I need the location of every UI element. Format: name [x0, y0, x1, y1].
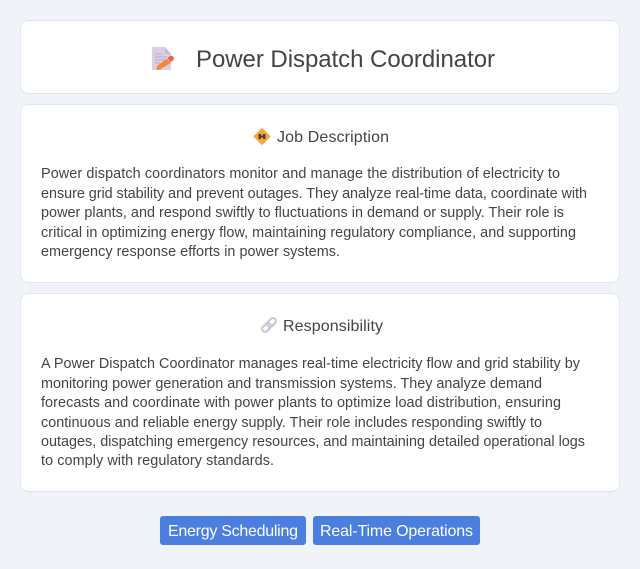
text block: responsibility: to comply with regulatory standards. — [41, 453, 274, 469]
title: Power Dispatch Coordinator — [196, 46, 495, 73]
icon: document with pencil — [152, 47, 174, 70]
text block: job description: power plants, and respond swiftly to fluctuations in demand or supply. Their role is — [41, 205, 564, 221]
text block: responsibility — [41, 356, 585, 469]
text block: responsibility: forecasts and coordinate with power plants to optimize load distribution, ensuring — [41, 395, 561, 411]
tag: real-time operations — [313, 516, 480, 545]
icon: chain link — [261, 317, 277, 333]
panel: title card — [20, 20, 620, 94]
text block: job description: Power dispatch coordinators monitor and manage the distribution of electricity to — [41, 166, 560, 182]
heading: responsibility: Responsibility — [283, 318, 383, 335]
text block: responsibility: continuous and reliable energy supply. Their role includes responding swiftly to — [41, 415, 542, 431]
panel: responsibility — [20, 294, 620, 492]
text block: responsibility: monitoring power generation and transmission systems. They analyze demand — [41, 376, 542, 392]
tag: energy scheduling — [160, 516, 306, 545]
text block: job description: emergency response efforts in power systems. — [41, 244, 340, 260]
tag: energy scheduling: Energy Scheduling — [168, 523, 298, 540]
heading: job description: Job Description — [277, 129, 389, 146]
text block: responsibility: A Power Dispatch Coordinator manages real-time electricity flow and grid stability by — [41, 356, 581, 372]
icon: diamond sign — [254, 128, 270, 144]
text block: job description — [41, 166, 587, 260]
text block: job description: ensure grid stability and prevent outages. They analyze real-time data, coordinate with — [41, 186, 587, 202]
tag: real-time operations: Real-Time Operations — [320, 523, 473, 540]
panel: job description — [20, 104, 620, 282]
text block: responsibility: outages, dispatching emergency resources, and maintaining detailed operational logs — [41, 434, 585, 450]
text block: job description: critical in optimizing energy flow, maintaining regulatory compliance, and supporting — [41, 225, 576, 241]
